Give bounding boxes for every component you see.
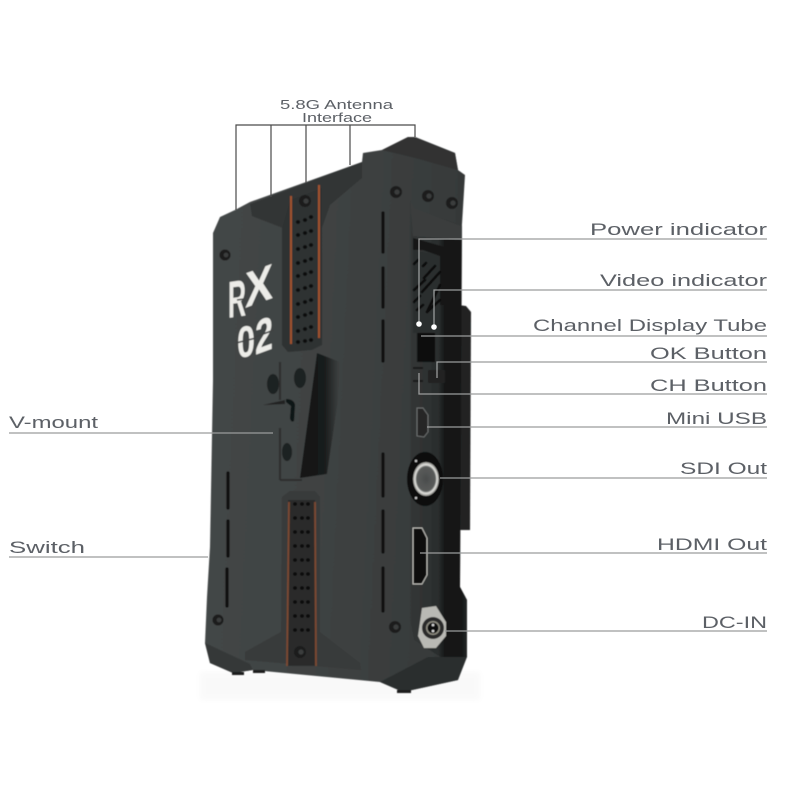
logo: RX 02: R	[228, 270, 246, 330]
ch button	[413, 368, 423, 381]
label: V-mount: V-mount	[9, 413, 98, 432]
label: 5.8G Antenna Interface	[280, 98, 393, 125]
ok button	[428, 370, 445, 383]
side panel	[410, 200, 467, 660]
lower vent strip	[245, 491, 361, 670]
label: OK Button: OK Button	[650, 344, 767, 363]
vertical slots	[227, 213, 383, 611]
side upper band	[410, 200, 462, 240]
logo: RX 02: X	[245, 252, 273, 319]
leader lines: right side	[419, 239, 767, 631]
side window	[413, 238, 455, 305]
indicator dots	[416, 321, 437, 330]
device shadow	[200, 672, 480, 700]
label: Mini USB: Mini USB	[666, 409, 767, 428]
top right shoulder	[382, 137, 458, 170]
label: Channel Display Tube: Channel Display Tube	[533, 316, 767, 335]
leader lines: left side	[9, 433, 273, 557]
channel display tube	[417, 333, 435, 362]
lower left foot line	[205, 643, 253, 673]
logo: RX 02: 0	[237, 317, 255, 368]
dc-in connector	[418, 606, 446, 648]
label: SDI Out: SDI Out	[680, 459, 767, 478]
bolts	[212, 186, 458, 658]
feet	[232, 670, 411, 693]
lower right foot	[380, 657, 467, 692]
label: 5.8G Antenna Interface: Interface	[302, 111, 372, 125]
device: RX02 receiver	[205, 137, 471, 693]
label: Power indicator: Power indicator	[590, 220, 768, 239]
top recess	[250, 162, 362, 228]
hdmi out port	[413, 528, 427, 584]
label: DC-IN: DC-IN	[702, 613, 767, 632]
label: 5.8G Antenna Interface: 5.8G Antenna	[280, 98, 393, 112]
label: CH Button: CH Button	[650, 376, 767, 395]
mini usb port	[417, 408, 428, 437]
device body	[205, 137, 467, 692]
v-mount plate	[263, 353, 340, 480]
label: HDMI Out: HDMI Out	[657, 535, 767, 554]
air vent	[413, 250, 440, 333]
leader lines: antenna bracket	[236, 125, 415, 210]
label: Video indicator: Video indicator	[600, 271, 767, 290]
logo: RX 02: 2	[255, 305, 273, 366]
logo: RX 02	[228, 252, 274, 368]
rear housing	[458, 305, 471, 530]
sdi out connector	[407, 452, 443, 506]
label: Switch: Switch	[9, 538, 85, 557]
upper vent strip	[282, 185, 322, 352]
